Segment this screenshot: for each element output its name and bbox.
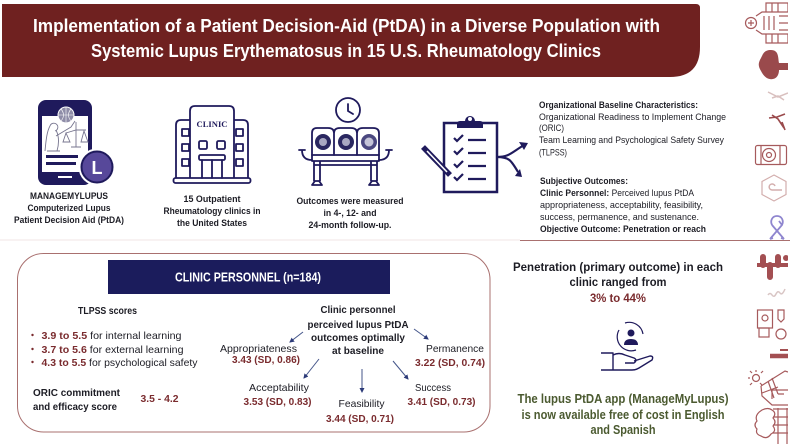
callout: app availability [518,392,728,437]
outcome: feasibility: Feasibility [338,398,385,410]
outcome: appropriateness: Appropriateness [220,343,297,355]
caption: clinics: 15 Outpatient [184,194,241,205]
text block: subjective and objective outcomes: Subjective Outcomes: [540,176,628,187]
text block: subjective and objective outcomes: Objective Outcome: Penetration or reach [540,224,706,235]
TLPSS scores: TLPSS scores [78,305,137,317]
text block: organizational baseline characteristics: (TLPSS) [539,148,567,158]
icon: faint scribble [768,92,788,100]
ORIC score: and efficacy score [33,401,117,413]
outcome: appropriateness: 3.43 (SD, 0.86) [232,354,300,366]
title: Implementation of a Patient Decision-Aid (PtDA) in a Diverse Population with [33,16,660,36]
title banner [2,4,700,77]
icon: faint squiggle [768,289,785,296]
caption: follow-up: Outcomes were measured [296,196,404,207]
outcomes heading: outcomes optimally [311,332,405,344]
caption: clinics: the United States [177,218,247,229]
ORIC score: ORIC commitment [33,387,120,399]
icon: house with sun [748,370,788,405]
icon: hand holding person [601,322,653,370]
icon: trees and ladder [755,408,788,444]
text block: penetration: 3% to 44% [590,291,646,305]
text block: organizational baseline characteristics: Team Learning and Psychological Safety Survey [539,135,724,146]
icon: waiting room seats with clock [299,98,392,185]
text block: penetration [513,260,723,305]
title: Systemic Lupus Erythematosus in 15 U.S. Rheumatology Clinics [91,41,601,61]
icon: hospital [746,3,788,43]
icon: image and magnifier [758,310,786,339]
icon: clinic building [174,106,250,183]
outcome: feasibility: 3.44 (SD, 0.71) [326,413,394,425]
outcome: appropriateness [220,343,300,366]
TLPSS scores: 4.3 to 5.5 for psychological safety [42,357,198,369]
ORIC score: 3.5 - 4.2 [140,393,179,405]
callout: app availability: is now available free of cost in English [522,408,724,422]
text block: organizational baseline characteristics: (ORIC) [539,123,564,134]
outcome: permanence [415,343,485,369]
caption: ManageMyLupus [14,191,124,226]
text block: penetration: Penetration (primary outcome) in each [513,260,723,274]
outcome: permanence: 3.22 (SD, 0.74) [415,357,485,369]
caption: follow-up [296,196,404,231]
outcome: success: Success [415,382,451,394]
outcomes heading: Clinic personnel [320,304,396,316]
icon: ManageMyLupus phone: L [92,158,102,178]
callout: app availability: and Spanish [590,423,656,437]
outcomes heading: at baseline [332,345,384,357]
text block: subjective and objective outcomes: appropriateness, acceptability, feasibility, [540,200,703,211]
text block: penetration: clinic ranged from [570,275,666,289]
icon: clinic building: CLINIC [196,120,228,129]
outcome: permanence: Permanence [426,343,484,355]
title [33,16,660,61]
outcome: acceptability: Acceptability [249,382,310,394]
TLPSS scores: 3.9 to 5.5 for internal learning [42,330,182,342]
text block: organizational baseline characteristics: Organizational Baseline Characteristics: [539,100,698,111]
panel: clinic personnel [18,254,490,432]
icon: ManageMyLupus phone [38,100,116,186]
decorative icon column [746,3,789,444]
icon: small blob [770,350,788,356]
icon: branch scribble [769,114,785,130]
TLPSS scores [31,305,198,369]
caption: ManageMyLupus: MANAGEMYLUPUS [30,191,108,202]
icon: clipboard with pencil and branching arrow [423,116,528,192]
caption: clinics: Rheumatology clinics in [164,206,261,217]
caption: ManageMyLupus: Computerized Lupus [28,203,110,214]
icon: phone landscape [756,146,786,164]
outcome: success: 3.41 (SD, 0.73) [408,396,476,408]
icon: hexagon [762,175,786,201]
caption: clinics [164,194,261,229]
caption: ManageMyLupus: Patient Decision Aid (PtDA) [14,215,124,226]
text block: subjective and objective outcomes: Clinic Personnel: Perceived lupus PtDA [540,188,695,199]
outcome arrows [290,329,428,392]
outcome: feasibility [326,398,394,425]
outcomes heading [308,304,409,357]
icon: brain [759,50,788,79]
text block: organizational baseline characteristics [539,100,726,158]
outcomes heading: perceived lupus PtDA [308,319,409,331]
outcome: acceptability: 3.53 (SD, 0.83) [244,396,312,408]
text block: subjective and objective outcomes [540,176,706,235]
caption: follow-up: 24-month follow-up. [308,220,392,231]
outcome: success [408,382,476,408]
caption: follow-up: in 4-, 12- and [324,208,377,219]
outcome: acceptability [244,382,312,408]
heading banner: CLINIC PERSONNEL (n=184) [175,270,321,284]
heading banner [108,260,390,294]
TLPSS scores: 3.7 to 5.6 for external learning [42,344,184,356]
text block: subjective and objective outcomes: success, permanence, and sustenance. [540,212,699,223]
ORIC score [33,387,179,413]
text block: organizational baseline characteristics: Organizational Readiness to Implement Change [539,112,726,123]
callout: app availability: The lupus PtDA app (ManageMyLupus) [518,392,728,406]
icon: awareness ribbon [770,216,784,239]
icon: fork shape [757,255,789,277]
